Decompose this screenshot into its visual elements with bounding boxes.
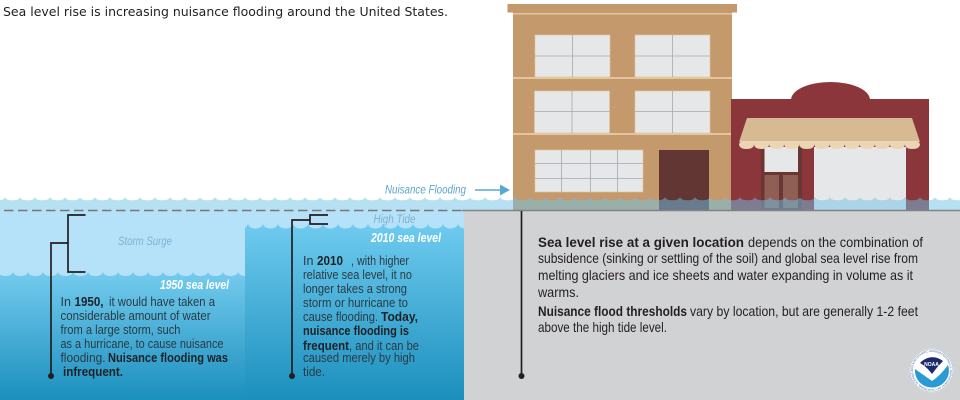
text block: 1950: considerable amount of water <box>60 309 210 323</box>
illustration: red shop <box>731 82 929 210</box>
text block: 2010: nuisance flooding is <box>303 324 409 338</box>
text block: 2010: tide. <box>303 365 325 379</box>
text block: sea level rise explanation: depends on the combination of <box>748 234 923 250</box>
text block: sea level rise explanation: Nuisance flood thresholds <box>538 303 687 319</box>
title: Sea level rise is increasing nuisance flooding around the United States. <box>3 4 448 19</box>
icon: NOAA logo: NOAA <box>924 362 939 368</box>
text block: 1950: In <box>60 295 71 309</box>
text block: 2010: frequent <box>303 339 350 353</box>
leader: 1950 storm surge bracket <box>48 215 86 379</box>
panel: 1950 water column <box>0 210 245 400</box>
leader: 2010 high tide bracket <box>289 215 328 379</box>
panel: ground <box>464 210 960 400</box>
label: high tide: High Tide <box>374 212 416 226</box>
text block: 1950 <box>60 295 228 379</box>
text block: sea level rise explanation: Sea level rise at a given location <box>538 234 744 250</box>
label: storm surge: Storm Surge <box>118 234 172 248</box>
sea level dashed line <box>4 210 462 212</box>
text block: sea level rise explanation: above the high tide level. <box>538 319 667 335</box>
text block: sea level rise explanation: melting glaciers and ice sheets and water expanding in volume as it <box>538 267 913 283</box>
text block: sea level rise explanation <box>537 234 923 335</box>
text block: sea level rise explanation: warms. <box>537 284 579 300</box>
text block: 1950: Nuisance flooding was <box>108 351 228 365</box>
text block: 1950: as a hurricane, to cause nuisance <box>60 337 224 351</box>
building door <box>659 150 709 210</box>
text block: 1950: flooding. <box>60 351 106 365</box>
text block: 2010: Today, <box>381 310 418 324</box>
flood water band <box>0 197 960 210</box>
text block: 2010: , with higher <box>351 254 409 268</box>
shop window <box>814 147 906 210</box>
icon: NOAA logo: NATIONAL OCEANIC AND ATMOSPHERIC ADMINISTRATION U.S. DEPARTMENT OF COMMERCE <box>911 350 952 391</box>
windows <box>534 35 710 192</box>
leader: right text <box>518 211 524 379</box>
label: 1950 sea level: 1950 sea level <box>160 277 229 292</box>
text block: 2010: caused merely by high <box>303 351 415 365</box>
panel: 2010 water column <box>245 210 464 400</box>
text block: 2010: longer takes a strong <box>303 282 407 296</box>
text block: 1950: it would have taken a <box>109 295 215 309</box>
text block: 1950: 1950, <box>74 295 104 309</box>
text block: 2010: , and it can be <box>349 339 419 353</box>
arrow: nuisance flooding <box>475 184 510 196</box>
text block: 2010: In <box>303 254 313 268</box>
text block: 2010: storm or hurricane to <box>303 296 408 310</box>
label: 2010 sea level: 2010 sea level <box>370 230 441 245</box>
ground line <box>462 210 960 212</box>
text block: sea level rise explanation: vary by location, but are generally 1-2 feet <box>690 303 918 319</box>
label: nuisance flooding: Nuisance Flooding <box>385 182 466 196</box>
text block: 1950: from a large storm, such <box>60 323 181 337</box>
awning <box>739 118 920 150</box>
shop door <box>761 147 802 210</box>
text block: 2010: cause flooding. <box>303 310 378 324</box>
window mullions <box>534 35 710 192</box>
text block: 2010: relative sea level, it no <box>303 268 412 282</box>
text block: 1950: infrequent. <box>63 365 123 379</box>
illustration: tan apartment building <box>508 4 737 210</box>
text block: 2010 <box>303 254 419 379</box>
text block: 2010: 2010 <box>317 254 343 268</box>
